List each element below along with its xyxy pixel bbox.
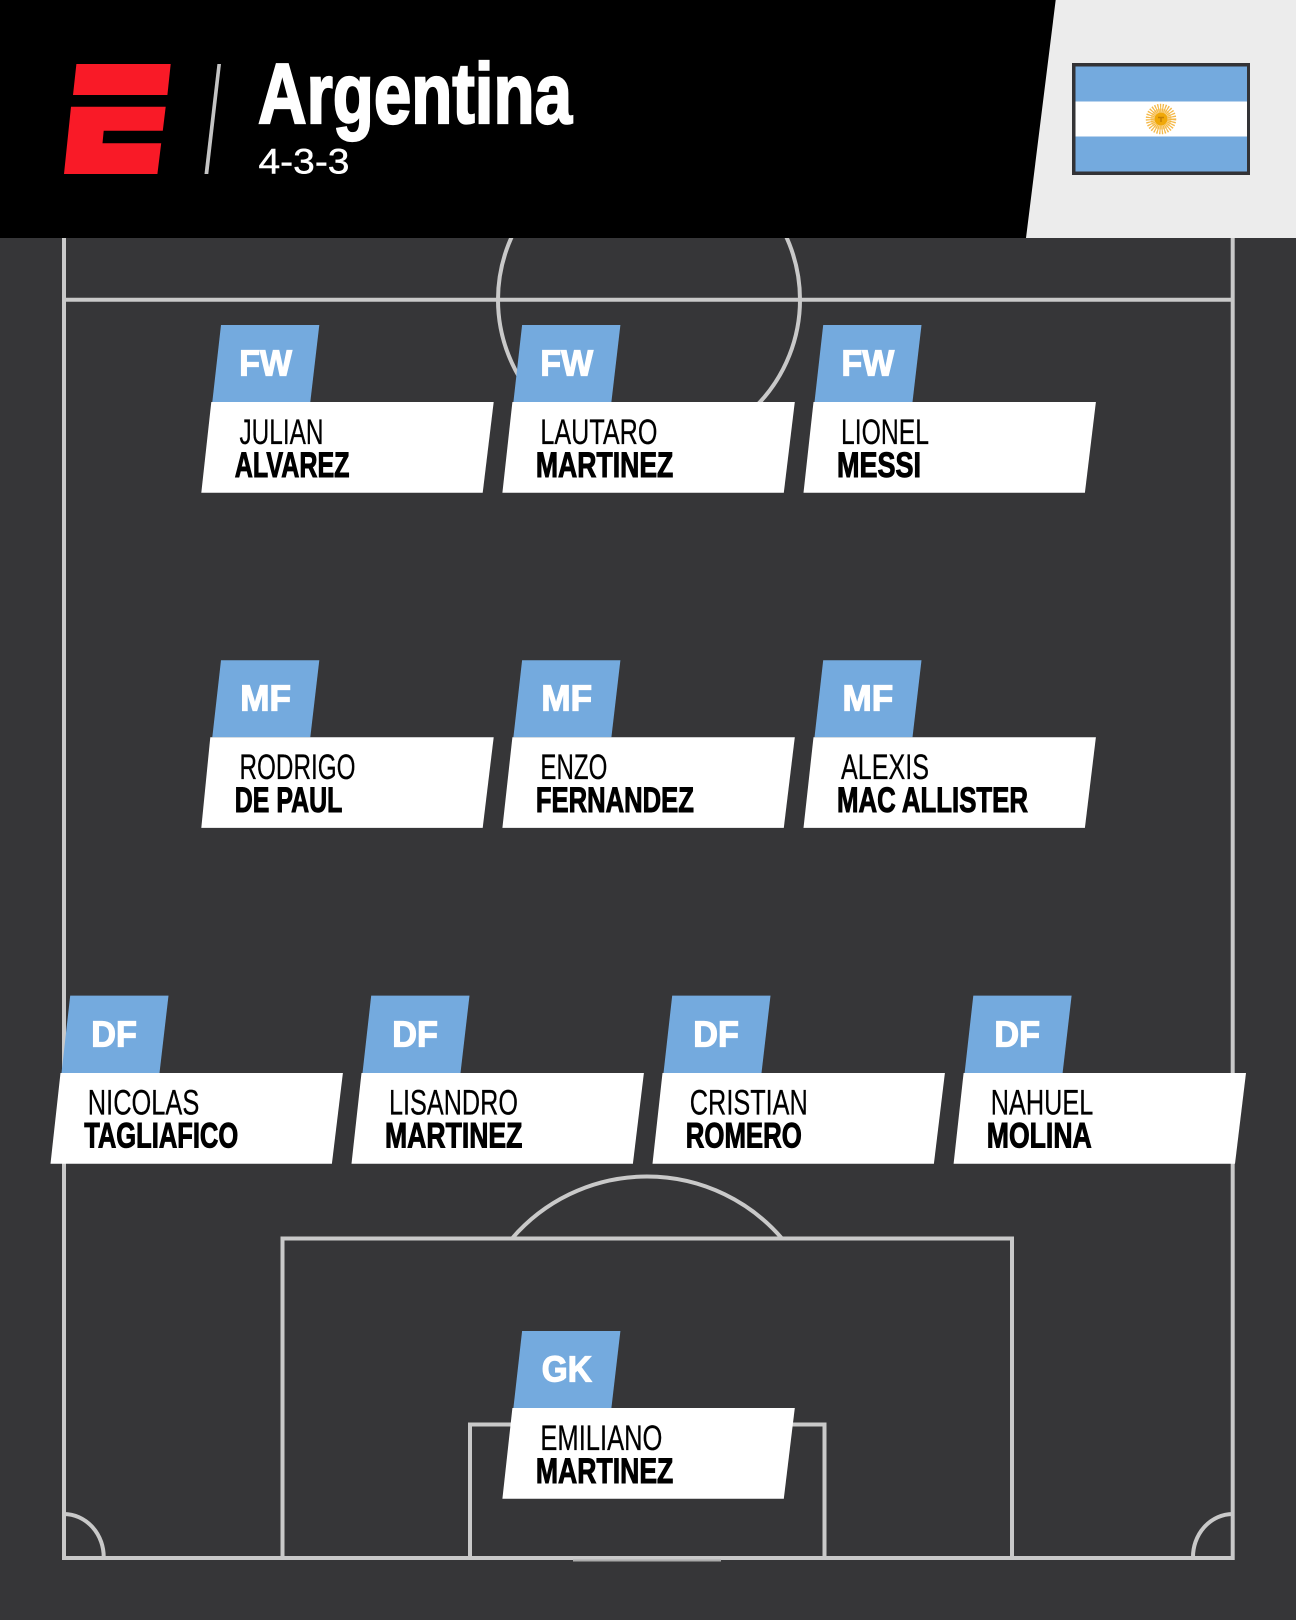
player card: Cristian Romero <box>652 996 945 1164</box>
player card: Alexis Mac Allister: ALEXIS <box>841 748 929 787</box>
pitch outline <box>64 238 1233 1558</box>
player card: Alexis Mac Allister: MAC ALLISTER <box>837 781 1028 820</box>
player card: Cristian Romero: ROMERO <box>686 1117 802 1156</box>
icon: Argentina flag <box>1072 63 1250 175</box>
player card: Nahuel Molina: DF <box>994 1013 1040 1054</box>
halfway line <box>64 298 1233 302</box>
player card: Nicolas Tagliafico: TAGLIAFICO <box>84 1117 238 1156</box>
player card: Rodrigo De Paul: DE PAUL <box>235 781 342 820</box>
player card: Lautaro Martinez <box>502 325 795 493</box>
goal area <box>470 1424 824 1558</box>
player card: Emiliano Martinez <box>502 1331 795 1499</box>
player card: Enzo Fernandez: MF <box>541 678 592 719</box>
left corner arc <box>64 1514 104 1558</box>
centre circle <box>498 149 800 451</box>
player card: Lionel Messi: FW <box>842 343 894 384</box>
goal line marker <box>573 1560 721 1562</box>
formation: 4-3-3 <box>258 143 350 182</box>
player card: Enzo Fernandez <box>502 660 795 828</box>
player card: Alexis Mac Allister <box>804 660 1096 828</box>
icon: ESPN logo <box>64 64 171 174</box>
title: Argentina <box>258 47 573 142</box>
player card: Nicolas Tagliafico: DF <box>91 1013 137 1054</box>
player card: Lautaro Martinez: MARTINEZ <box>536 446 673 485</box>
player card: Nahuel Molina <box>954 996 1246 1164</box>
player card: Lisandro Martinez: LISANDRO <box>389 1084 518 1123</box>
player card: Nicolas Tagliafico <box>50 996 343 1164</box>
player card: Rodrigo De Paul <box>201 660 494 828</box>
player card: Emiliano Martinez: GK <box>542 1349 592 1390</box>
player card: Julian Alvarez: FW <box>239 343 292 384</box>
player card: Lionel Messi: MESSI <box>837 446 921 485</box>
player card: Enzo Fernandez: ENZO <box>540 748 607 787</box>
player card: Nicolas Tagliafico: NICOLAS <box>88 1084 199 1123</box>
penalty area <box>282 1238 1012 1558</box>
flag panel background <box>1026 0 1296 238</box>
header divider <box>204 64 221 174</box>
pitch markings <box>64 149 1233 1562</box>
player card: Julian Alvarez: ALVAREZ <box>235 446 350 485</box>
player card: Cristian Romero: CRISTIAN <box>690 1084 808 1123</box>
player card: Lautaro Martinez: LAUTARO <box>540 413 657 452</box>
player card: Lionel Messi: LIONEL <box>841 413 929 452</box>
player card: Emiliano Martinez: EMILIANO <box>540 1419 662 1458</box>
player card: Lautaro Martinez: FW <box>540 343 593 384</box>
header band <box>0 0 1296 238</box>
player card: Enzo Fernandez: FERNANDEZ <box>536 781 694 820</box>
player card: Julian Alvarez <box>201 325 494 493</box>
player card: Lionel Messi <box>804 325 1096 493</box>
player card: Rodrigo De Paul: RODRIGO <box>240 748 356 787</box>
player card: Lisandro Martinez: DF <box>392 1013 438 1054</box>
player card: Alexis Mac Allister: MF <box>842 678 893 719</box>
penalty arc <box>512 1177 782 1238</box>
black header background <box>0 0 1296 238</box>
player card: Julian Alvarez: JULIAN <box>240 413 324 452</box>
right corner arc <box>1193 1514 1233 1558</box>
player card: Lisandro Martinez <box>352 996 644 1164</box>
player card: Nahuel Molina: NAHUEL <box>991 1084 1093 1123</box>
player card: Nahuel Molina: MOLINA <box>987 1117 1092 1156</box>
player card: Cristian Romero: DF <box>693 1013 739 1054</box>
player card: Rodrigo De Paul: MF <box>240 678 291 719</box>
player card: Lisandro Martinez: MARTINEZ <box>385 1117 522 1156</box>
player card: Emiliano Martinez: MARTINEZ <box>536 1452 673 1491</box>
